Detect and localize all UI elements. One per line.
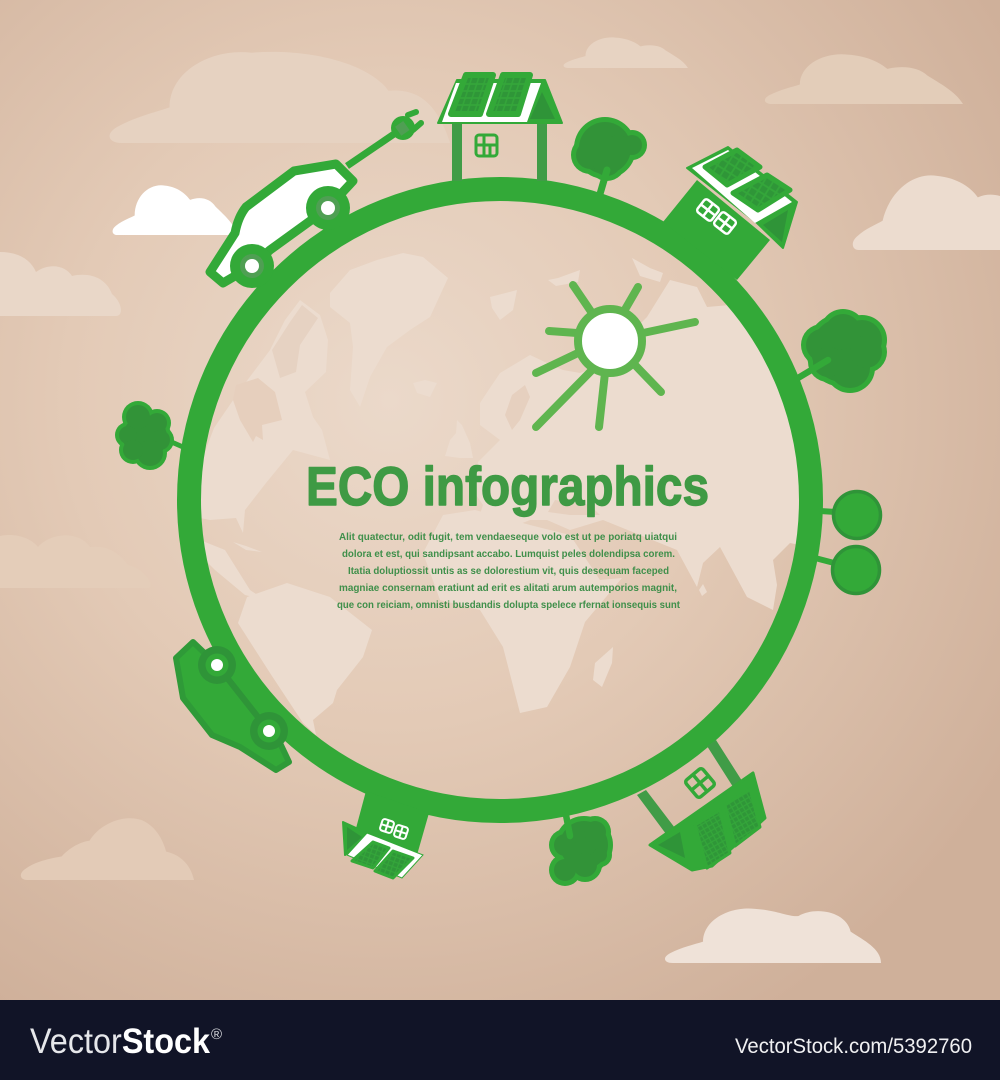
house: bottom left <box>343 791 429 878</box>
house: bottom right <box>637 740 765 870</box>
tree: bottom <box>549 815 613 886</box>
continent: North America <box>200 300 330 533</box>
roof <box>687 147 797 248</box>
VectorStock logo: VectorStock <box>30 1022 210 1061</box>
wall <box>355 791 429 855</box>
tree: right <box>798 309 887 393</box>
connector upper <box>820 511 836 512</box>
sun rays <box>536 285 695 427</box>
tree: left <box>115 401 183 470</box>
cloud: left edge upper <box>0 252 121 316</box>
windows <box>379 818 409 840</box>
Sri Lanka <box>699 584 707 596</box>
body text <box>337 531 680 611</box>
wheel upper <box>198 646 236 684</box>
roof <box>650 773 765 870</box>
green car: bottom left <box>176 642 289 770</box>
world map <box>200 253 830 735</box>
crown <box>576 122 642 176</box>
trunk <box>798 360 828 378</box>
car front wheel <box>306 186 350 230</box>
house window <box>476 135 497 156</box>
car body <box>210 164 353 283</box>
windows <box>696 198 737 235</box>
plug cable <box>347 132 397 166</box>
roof white face <box>347 833 423 878</box>
solar panels <box>352 842 413 878</box>
cloud: top right <box>765 54 963 104</box>
crown outline <box>801 309 887 393</box>
footer <box>0 1000 1000 1080</box>
axle line <box>217 665 269 731</box>
body text: magniae consernam eratiunt ad erit es alitati arum autemporios magnit, <box>339 582 677 594</box>
walls <box>637 740 744 838</box>
car body <box>176 642 289 770</box>
circle upper <box>834 492 880 538</box>
crown outline <box>115 401 174 470</box>
plug <box>391 112 421 140</box>
crown <box>806 314 882 388</box>
Greenland <box>330 253 448 368</box>
green ring <box>189 189 811 811</box>
crown outline <box>571 117 647 181</box>
gable <box>658 832 685 858</box>
sun <box>536 285 695 427</box>
trunk <box>600 170 607 194</box>
crown <box>119 405 170 466</box>
window <box>685 768 715 798</box>
Madagascar <box>593 647 613 687</box>
Arctic channels <box>272 305 318 378</box>
body text: Alit quatectur, odit fugit, tem vendaeseque volo est ut pe poriatq uiatqui <box>339 531 677 543</box>
circle lower <box>832 546 880 594</box>
Central America <box>204 542 256 596</box>
solar panels <box>695 789 760 868</box>
cloud: left edge lower <box>0 535 151 588</box>
gable <box>763 210 788 242</box>
cloud: bottom right <box>665 908 881 963</box>
image id: VectorStock.com/5392760 <box>735 1035 972 1058</box>
Black Sea and Baltic <box>505 385 600 515</box>
white electric car <box>210 112 421 288</box>
solar panels <box>451 75 530 114</box>
continent: South America <box>238 583 372 735</box>
body text: dolora et est, qui sandipsant accabo. Lumquist peles dolendipsa corem. <box>342 548 675 560</box>
continent: Africa <box>423 510 622 713</box>
roof white face <box>692 150 792 223</box>
roof white face <box>442 83 541 122</box>
footer bar <box>0 1000 1000 1080</box>
registered mark: ® <box>211 1026 222 1043</box>
house walls <box>452 123 547 181</box>
cloud: bottom left <box>21 818 194 880</box>
trunk <box>160 437 183 447</box>
Cuba <box>234 542 261 552</box>
title: ECO infographics <box>306 455 709 517</box>
roof <box>438 80 562 123</box>
cloud: right edge <box>853 175 1000 250</box>
cloud: white <box>113 185 238 235</box>
Britain <box>445 420 473 458</box>
roof side <box>343 822 367 855</box>
continent: Eurasia <box>474 280 830 610</box>
cloud: top centre <box>564 37 688 68</box>
crown outline <box>549 816 613 886</box>
tree: top <box>571 117 647 194</box>
wheel lower <box>250 712 288 750</box>
Iceland <box>413 380 437 397</box>
solar panels <box>705 150 790 210</box>
trunk <box>566 815 570 836</box>
car rear wheel <box>230 244 274 288</box>
round trees: right <box>815 492 880 594</box>
cloud: large top left <box>110 52 450 143</box>
gable <box>347 827 362 850</box>
connector lower <box>815 558 838 564</box>
Hudson Bay <box>233 378 282 442</box>
crown <box>554 821 608 881</box>
house: top right <box>663 147 797 280</box>
roof gable <box>530 92 555 119</box>
house: top <box>438 75 562 181</box>
Arctic islands <box>490 258 663 320</box>
wall <box>663 180 770 280</box>
sun disc <box>578 309 642 373</box>
body text: que con reiciam, omnisti busdandis dolupta spelece rfernat ionsequis sunt <box>337 599 680 611</box>
body text: Itatia doluptiossit untis as se dolorestium vit, quis desequam faceped <box>348 565 669 577</box>
